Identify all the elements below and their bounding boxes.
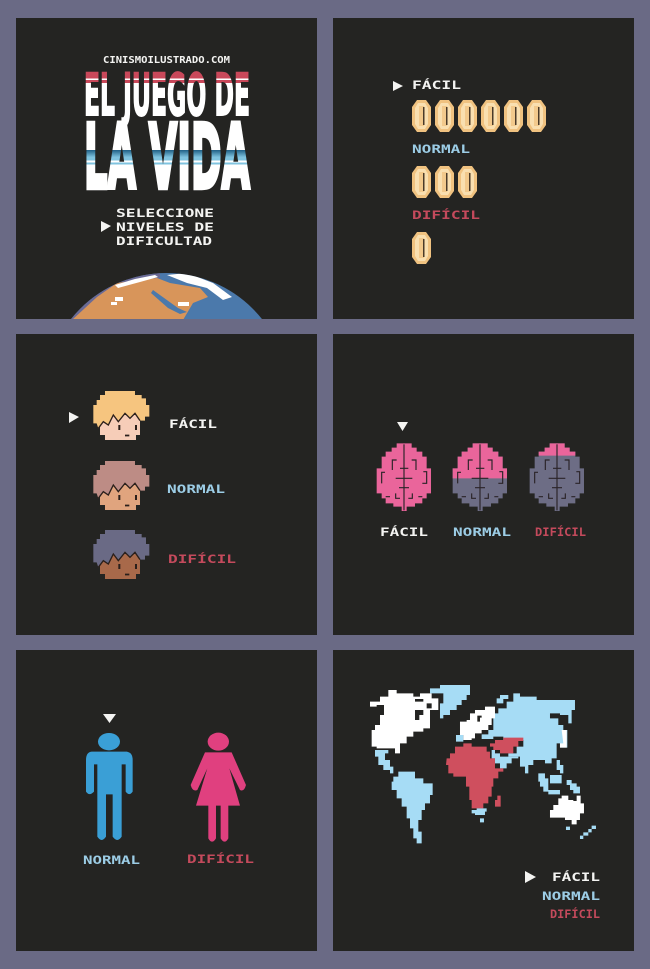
six coins [412,100,546,132]
icon: light head [93,391,149,440]
icon: selection arrow [69,412,79,423]
label: facil: FÁCIL [412,77,461,92]
icon: selection arrow [397,422,408,431]
panel: skin colour [16,334,317,635]
title: el juego de: EL JUEGO DE [84,63,250,129]
panel: money [333,18,634,319]
label: dificil: DIFÍCIL [168,551,236,566]
label: dificil: DIFÍCIL [535,524,586,539]
menu text: SELECCIONE [116,206,214,220]
title: la vida: LA VIDA [84,105,250,209]
label: normal: NORMAL [542,889,600,903]
icon: earth [71,273,262,319]
southern africa [472,808,487,815]
icon: selection arrow [393,81,403,91]
label: facil: FÁCIL [552,869,600,884]
middle east [490,738,523,753]
iberia and turkey [456,734,493,742]
world map [370,685,596,843]
eurasia [488,693,575,773]
icon: medium head [93,461,149,510]
canadian bays [415,699,432,720]
southeast asia islands [480,695,596,839]
panel: gender [16,650,317,951]
baltic sea [477,716,482,722]
panel: title screen [16,18,317,319]
japan [560,730,567,748]
icon: half pink brain [453,443,507,511]
south america [392,772,433,843]
africa [446,743,503,808]
label: normal: NORMAL [167,482,225,496]
panel: brains [333,334,634,635]
label: facil: FÁCIL [169,416,217,431]
icon: full pink brain [377,443,431,511]
label: facil: FÁCIL [380,524,428,539]
menu text [116,206,214,248]
madagascar [495,796,501,807]
label: dificil: DIFÍCIL [550,906,600,921]
label: normal: NORMAL [412,142,470,156]
icon: selection arrow [103,714,116,723]
panel: world map [333,650,634,951]
label: normal: NORMAL [83,853,140,867]
menu text: NIVELES DE [116,220,214,234]
australia [550,796,584,824]
icon: mostly grey brain [530,443,584,511]
label: dificil: DIFÍCIL [187,851,254,866]
one coin [412,232,431,264]
icon: selection arrow [101,221,111,232]
label: normal: NORMAL [453,525,511,539]
three coins [412,166,477,198]
arabia [492,750,518,768]
greenland [430,685,470,718]
icon: man [86,733,133,840]
north america [370,690,438,753]
europe [460,707,495,740]
central america [375,750,393,773]
icon: woman [191,733,246,842]
website credit: CINISMOILUSTRADO.COM [103,55,230,66]
menu text: DIFICULTAD [116,234,212,248]
icon: dark head [93,530,149,579]
icon: selection arrow [525,871,536,883]
label: dificil: DIFÍCIL [412,207,480,222]
